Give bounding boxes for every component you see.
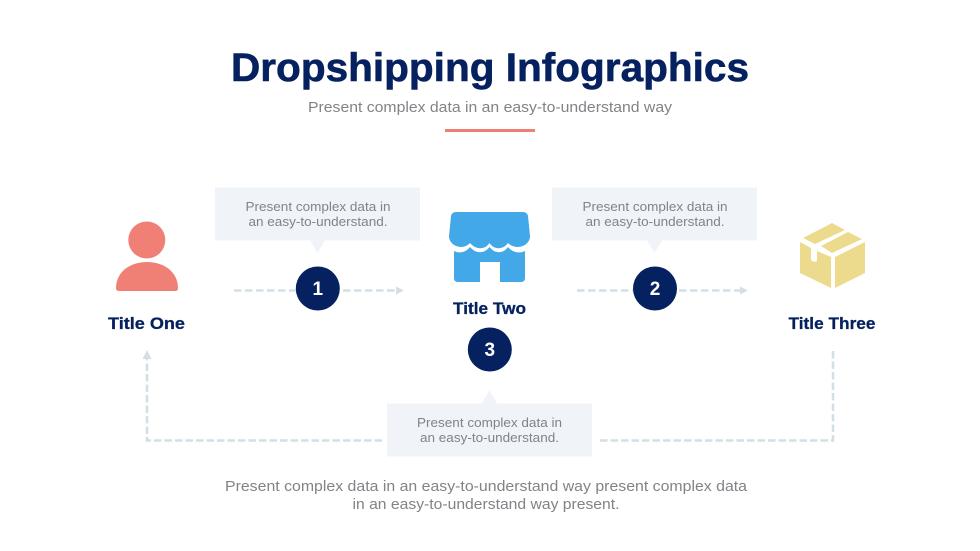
arrow: two to three bbox=[577, 286, 748, 294]
label: title one: Title One bbox=[108, 314, 185, 333]
callout: step one bbox=[215, 188, 420, 253]
callout: step two: an easy-to-understand. bbox=[586, 215, 724, 229]
footer text: in an easy-to-understand way present. bbox=[352, 496, 620, 513]
callout: step one: an easy-to-understand. bbox=[248, 215, 388, 229]
badge: step two bbox=[633, 266, 677, 310]
icon: store bbox=[449, 212, 530, 282]
connector: three to title three bbox=[600, 350, 833, 440]
callout: step two bbox=[552, 188, 757, 253]
badge: step one: 1 bbox=[313, 279, 324, 300]
badge: step two: 2 bbox=[650, 279, 660, 300]
callout: step two: Present complex data in bbox=[582, 200, 728, 214]
label: title two: Title Two bbox=[453, 299, 526, 318]
badge: step three: 3 bbox=[485, 340, 495, 361]
arrow: three to one bbox=[142, 350, 382, 440]
footer text: Present complex data in an easy-to-understand way present complex data bbox=[225, 478, 748, 495]
title underline bbox=[445, 129, 535, 132]
subtitle: Present complex data in an easy-to-understand way bbox=[308, 99, 673, 116]
callout: step one: Present complex data in bbox=[246, 200, 391, 214]
badge: step one bbox=[296, 266, 340, 310]
arrow: one to two bbox=[234, 286, 404, 294]
callout: step three: an easy-to-understand. bbox=[420, 431, 559, 445]
callout: step three bbox=[387, 390, 592, 456]
footer text bbox=[225, 478, 748, 513]
badge: step three bbox=[468, 328, 512, 372]
label: title three: Title Three bbox=[788, 314, 876, 333]
callout: step three: Present complex data in bbox=[417, 416, 562, 430]
icon: package box bbox=[800, 223, 865, 288]
icon: person bbox=[116, 222, 178, 291]
title: Dropshipping Infographics bbox=[231, 46, 749, 90]
